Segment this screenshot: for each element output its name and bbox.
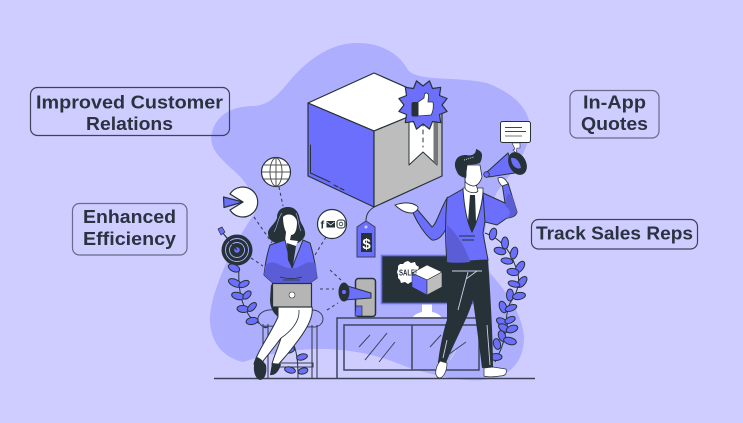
hair highlights [274,213,301,232]
bottom plant [283,337,309,378]
globe icon [262,158,290,186]
laptop [272,284,312,307]
cabinet [337,318,479,378]
label: Track Sales Reps: Track Sales Reps [536,224,693,244]
label: In-App Quotes: In-App [583,92,646,112]
label: Improved Customer Relations: Improved Customer [36,92,223,112]
label: Track Sales Reps [532,220,698,249]
man [395,149,531,378]
woman [254,207,317,380]
speech bubble [500,122,530,153]
ribbon [409,118,437,165]
label: Improved Customer Relations: Relations [86,114,173,134]
jacket shading [264,262,317,283]
phone and megaphone [338,278,376,316]
head [465,178,478,193]
sale badge [397,261,419,284]
badge with thumbs up [399,81,447,129]
price tag: $ [362,236,371,253]
jacket [264,240,317,283]
face and neck [283,215,298,254]
trousers [438,258,493,368]
dashed connectors [251,187,341,310]
background blob [210,43,530,380]
shoes [436,361,447,378]
label: Improved Customer Relations [30,88,230,136]
legs [254,307,312,367]
label: In-App Quotes [570,90,659,138]
social icons [318,210,346,238]
label: In-App Quotes: Quotes [581,114,648,134]
monitor: SALE! [399,268,417,278]
cube [308,73,442,207]
pie chart icon [224,187,258,217]
skirt [270,284,284,318]
monitor [382,256,472,317]
mini cube [412,265,442,280]
label: Enhanced Efficiency [72,204,187,255]
social icons: f [320,220,324,232]
left arm and hand [413,198,448,240]
blouse [287,243,296,268]
shoes [254,357,266,380]
floor line [214,378,535,380]
hair [268,207,305,243]
shirt [463,188,483,232]
left plant [227,262,272,329]
right arm and hand [483,183,517,225]
megaphone [487,153,515,177]
label: Enhanced Efficiency: Enhanced [83,207,176,227]
right plant [485,227,529,362]
tie [468,195,476,232]
label: Enhanced Efficiency: Efficiency [83,229,176,249]
price tag [357,207,375,257]
target icon [218,227,252,266]
stool [258,310,323,378]
jacket [446,189,489,262]
